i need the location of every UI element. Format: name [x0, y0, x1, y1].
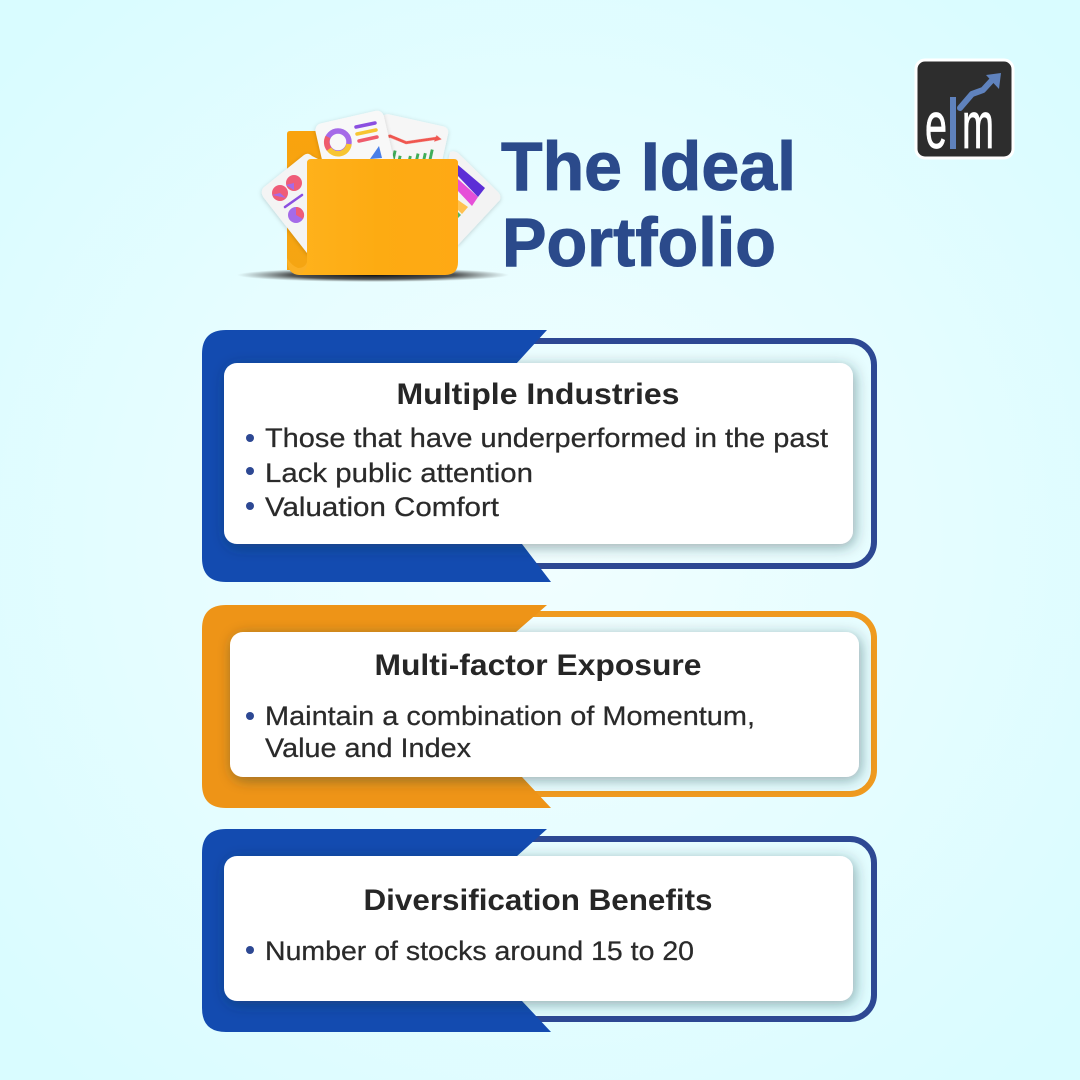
bullet list: Number of stocks around 15 to 20	[265, 936, 694, 966]
bullet list: Valuation Comfort	[265, 492, 500, 522]
icon: folder with report sheets	[237, 109, 509, 282]
panel: Multiple Industries	[202, 330, 874, 582]
logo: elm: e	[925, 88, 947, 162]
bullet list	[246, 701, 755, 763]
panel frame outline	[400, 839, 874, 1019]
bullet list: Lack public attention	[265, 458, 533, 488]
icon: donut sheet	[314, 109, 398, 193]
panel: Diversification Benefits	[202, 829, 874, 1032]
title: Portfolio	[502, 204, 776, 281]
title	[501, 128, 796, 281]
icon: line chart sheet	[370, 113, 449, 188]
panel tab	[202, 330, 551, 582]
card	[224, 363, 853, 544]
bullet list: Value and Index	[265, 733, 472, 763]
card heading: Diversification Benefits	[364, 884, 712, 917]
logo: elm: m	[962, 88, 994, 162]
card	[230, 632, 859, 777]
bullet list: Those that have underperformed in the past	[265, 423, 829, 453]
icon: folder back	[287, 131, 330, 270]
logo: elm	[916, 60, 1013, 162]
card heading: Multi-factor Exposure	[374, 649, 702, 682]
icon: pie chart sheet	[262, 154, 320, 262]
bullet list: Maintain a combination of Momentum,	[265, 701, 755, 731]
icon: ground shadow	[237, 268, 509, 282]
panel tab	[202, 605, 551, 808]
panel frame outline	[400, 614, 874, 794]
panel frame outline	[400, 341, 874, 566]
panel tab	[202, 829, 551, 1032]
bullet list	[246, 423, 829, 522]
icon: folder front	[298, 159, 458, 275]
title: The Ideal	[501, 128, 796, 205]
icon: chart sheet right	[440, 151, 500, 246]
card	[224, 856, 853, 1001]
icon: folder curl	[287, 255, 312, 275]
card heading: Multiple Industries	[396, 378, 680, 411]
panel: Multi-factor Exposure	[202, 605, 874, 808]
